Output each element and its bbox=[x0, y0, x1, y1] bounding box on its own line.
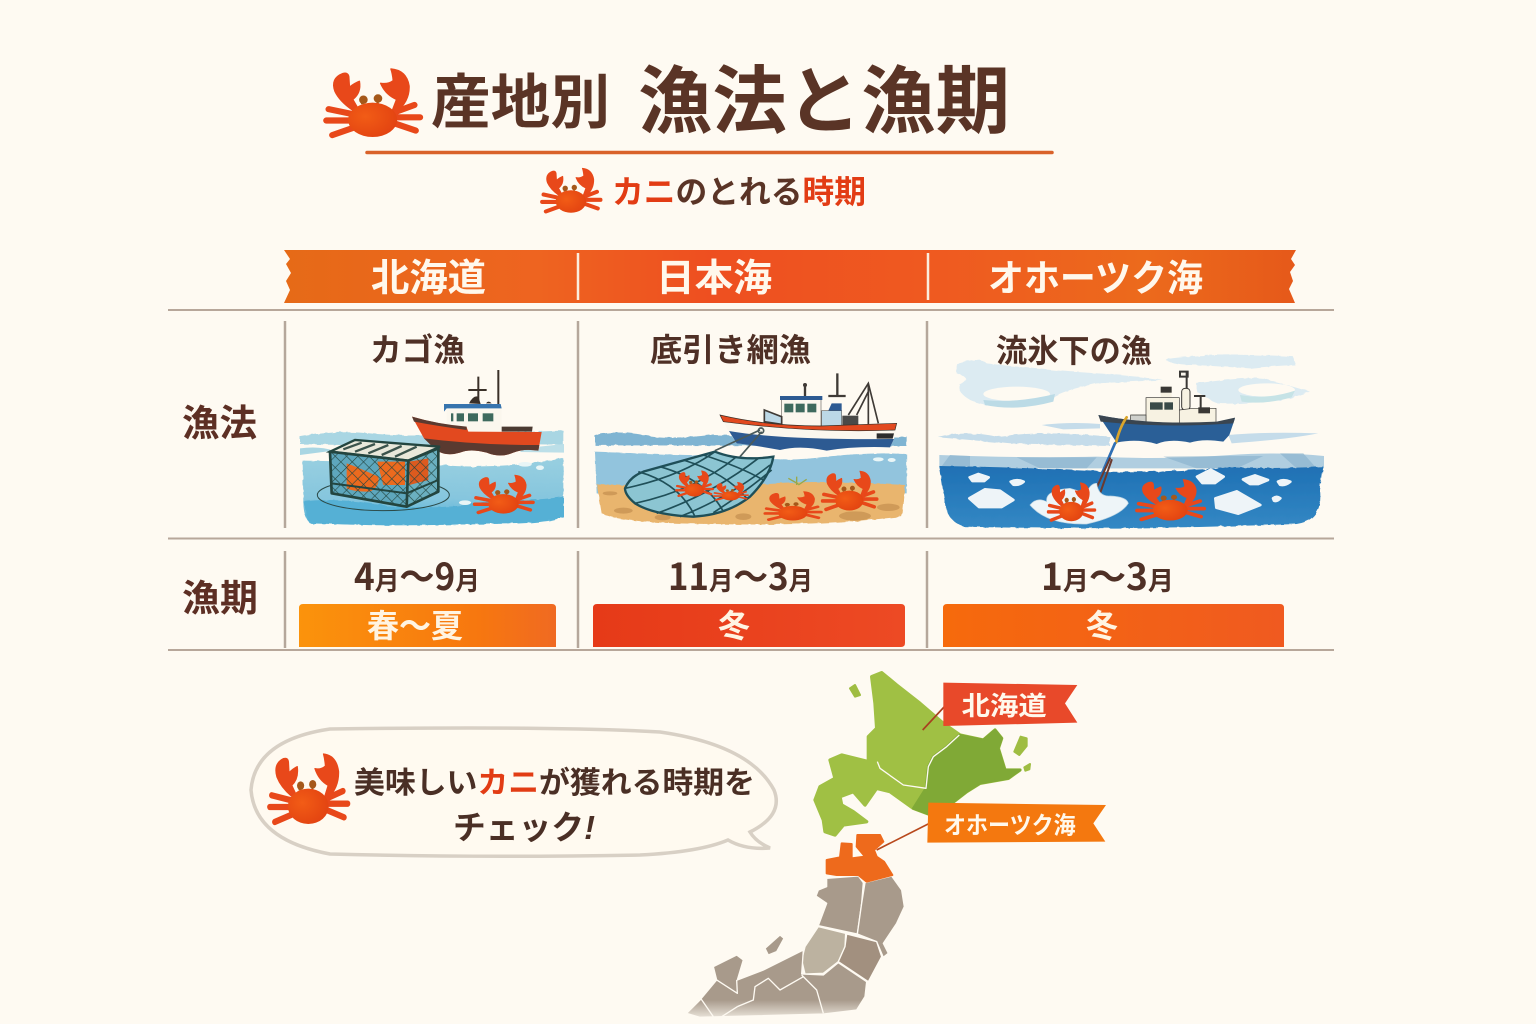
icon: crab caught in splash bbox=[1048, 483, 1095, 521]
illustration: fishing under drift ice bbox=[938, 355, 1324, 528]
icon: title crab bbox=[326, 69, 420, 137]
icon: subtitle crab bbox=[542, 168, 601, 213]
splash bbox=[1030, 483, 1128, 524]
season bar: 冬 (日本海) bbox=[593, 604, 905, 647]
boat bbox=[412, 370, 542, 455]
icon: crab on the sea floor bbox=[475, 475, 533, 514]
ice floes bbox=[969, 470, 1290, 514]
subtitle bbox=[542, 168, 866, 213]
row label: 漁期: 漁期 bbox=[182, 578, 258, 619]
flag: オホーツク海 bbox=[927, 803, 1106, 843]
icon: bubble crab bbox=[270, 754, 348, 824]
fishing rope bbox=[1093, 417, 1127, 498]
icon: crab on sand left bbox=[765, 491, 821, 521]
icon: crab on sand right bbox=[823, 471, 877, 511]
map: Honshu regions bbox=[687, 876, 904, 1017]
bubble text line 1: 美味しいカニが獲れる時期を bbox=[354, 766, 755, 800]
title text: 産地別: 産地別 bbox=[431, 70, 610, 136]
leader line: 北海道 bbox=[923, 706, 945, 730]
season: 1月〜3月: 1月〜3月 bbox=[1041, 547, 1174, 601]
trawl net bbox=[625, 452, 773, 517]
title underline bbox=[367, 151, 1052, 154]
title text: 漁法と漁期: 漁法と漁期 bbox=[638, 60, 1010, 143]
map: northern Honshu highlight bbox=[827, 835, 892, 882]
method label: 底引き網漁: 底引き網漁 bbox=[650, 332, 811, 368]
method label: 流氷下の漁: 流氷下の漁 bbox=[996, 333, 1152, 369]
season: 4月〜9月: 4月〜9月 bbox=[354, 547, 480, 601]
season bar: 冬 (日本海): 冬 bbox=[718, 608, 750, 644]
season bar: 春〜夏: 春〜夏 bbox=[367, 608, 463, 644]
flag: 北海道: 北海道 bbox=[962, 691, 1047, 721]
icon: crab in water bbox=[1137, 480, 1204, 520]
map of northern Japan bbox=[680, 673, 1106, 1023]
boat bbox=[1098, 372, 1235, 444]
table header band bbox=[284, 250, 1296, 303]
subtitle text: カニのとれる時期 bbox=[612, 174, 866, 210]
flag: オホーツク海: オホーツク海 bbox=[944, 812, 1076, 839]
header: 日本海: 日本海 bbox=[656, 258, 772, 300]
bubble text line 2: チェック! bbox=[453, 809, 595, 846]
boat bbox=[720, 373, 897, 451]
illustration: cage fishing bbox=[300, 370, 564, 525]
season bar: 冬 (オホーツク海): 冬 bbox=[1086, 608, 1118, 644]
map: Hokkaido bbox=[815, 673, 1030, 835]
title bbox=[326, 60, 1010, 143]
season: 11月〜3月: 11月〜3月 bbox=[668, 547, 813, 601]
speech bubble bbox=[251, 728, 776, 856]
season bar: 冬 (オホーツク海) bbox=[943, 604, 1284, 647]
flag: 北海道 bbox=[943, 683, 1077, 726]
header: 北海道: 北海道 bbox=[371, 258, 486, 300]
leader line: オホーツク海 bbox=[877, 823, 929, 850]
season bar: 春〜夏 bbox=[299, 604, 556, 647]
illustration: bottom trawl fishing bbox=[595, 373, 907, 525]
method label: カゴ漁: カゴ漁 bbox=[370, 332, 465, 368]
icon: crabs in the net bbox=[676, 471, 713, 497]
crab trap bbox=[330, 440, 440, 507]
header: オホーツク海: オホーツク海 bbox=[988, 258, 1203, 299]
row label: 漁法: 漁法 bbox=[182, 403, 257, 444]
